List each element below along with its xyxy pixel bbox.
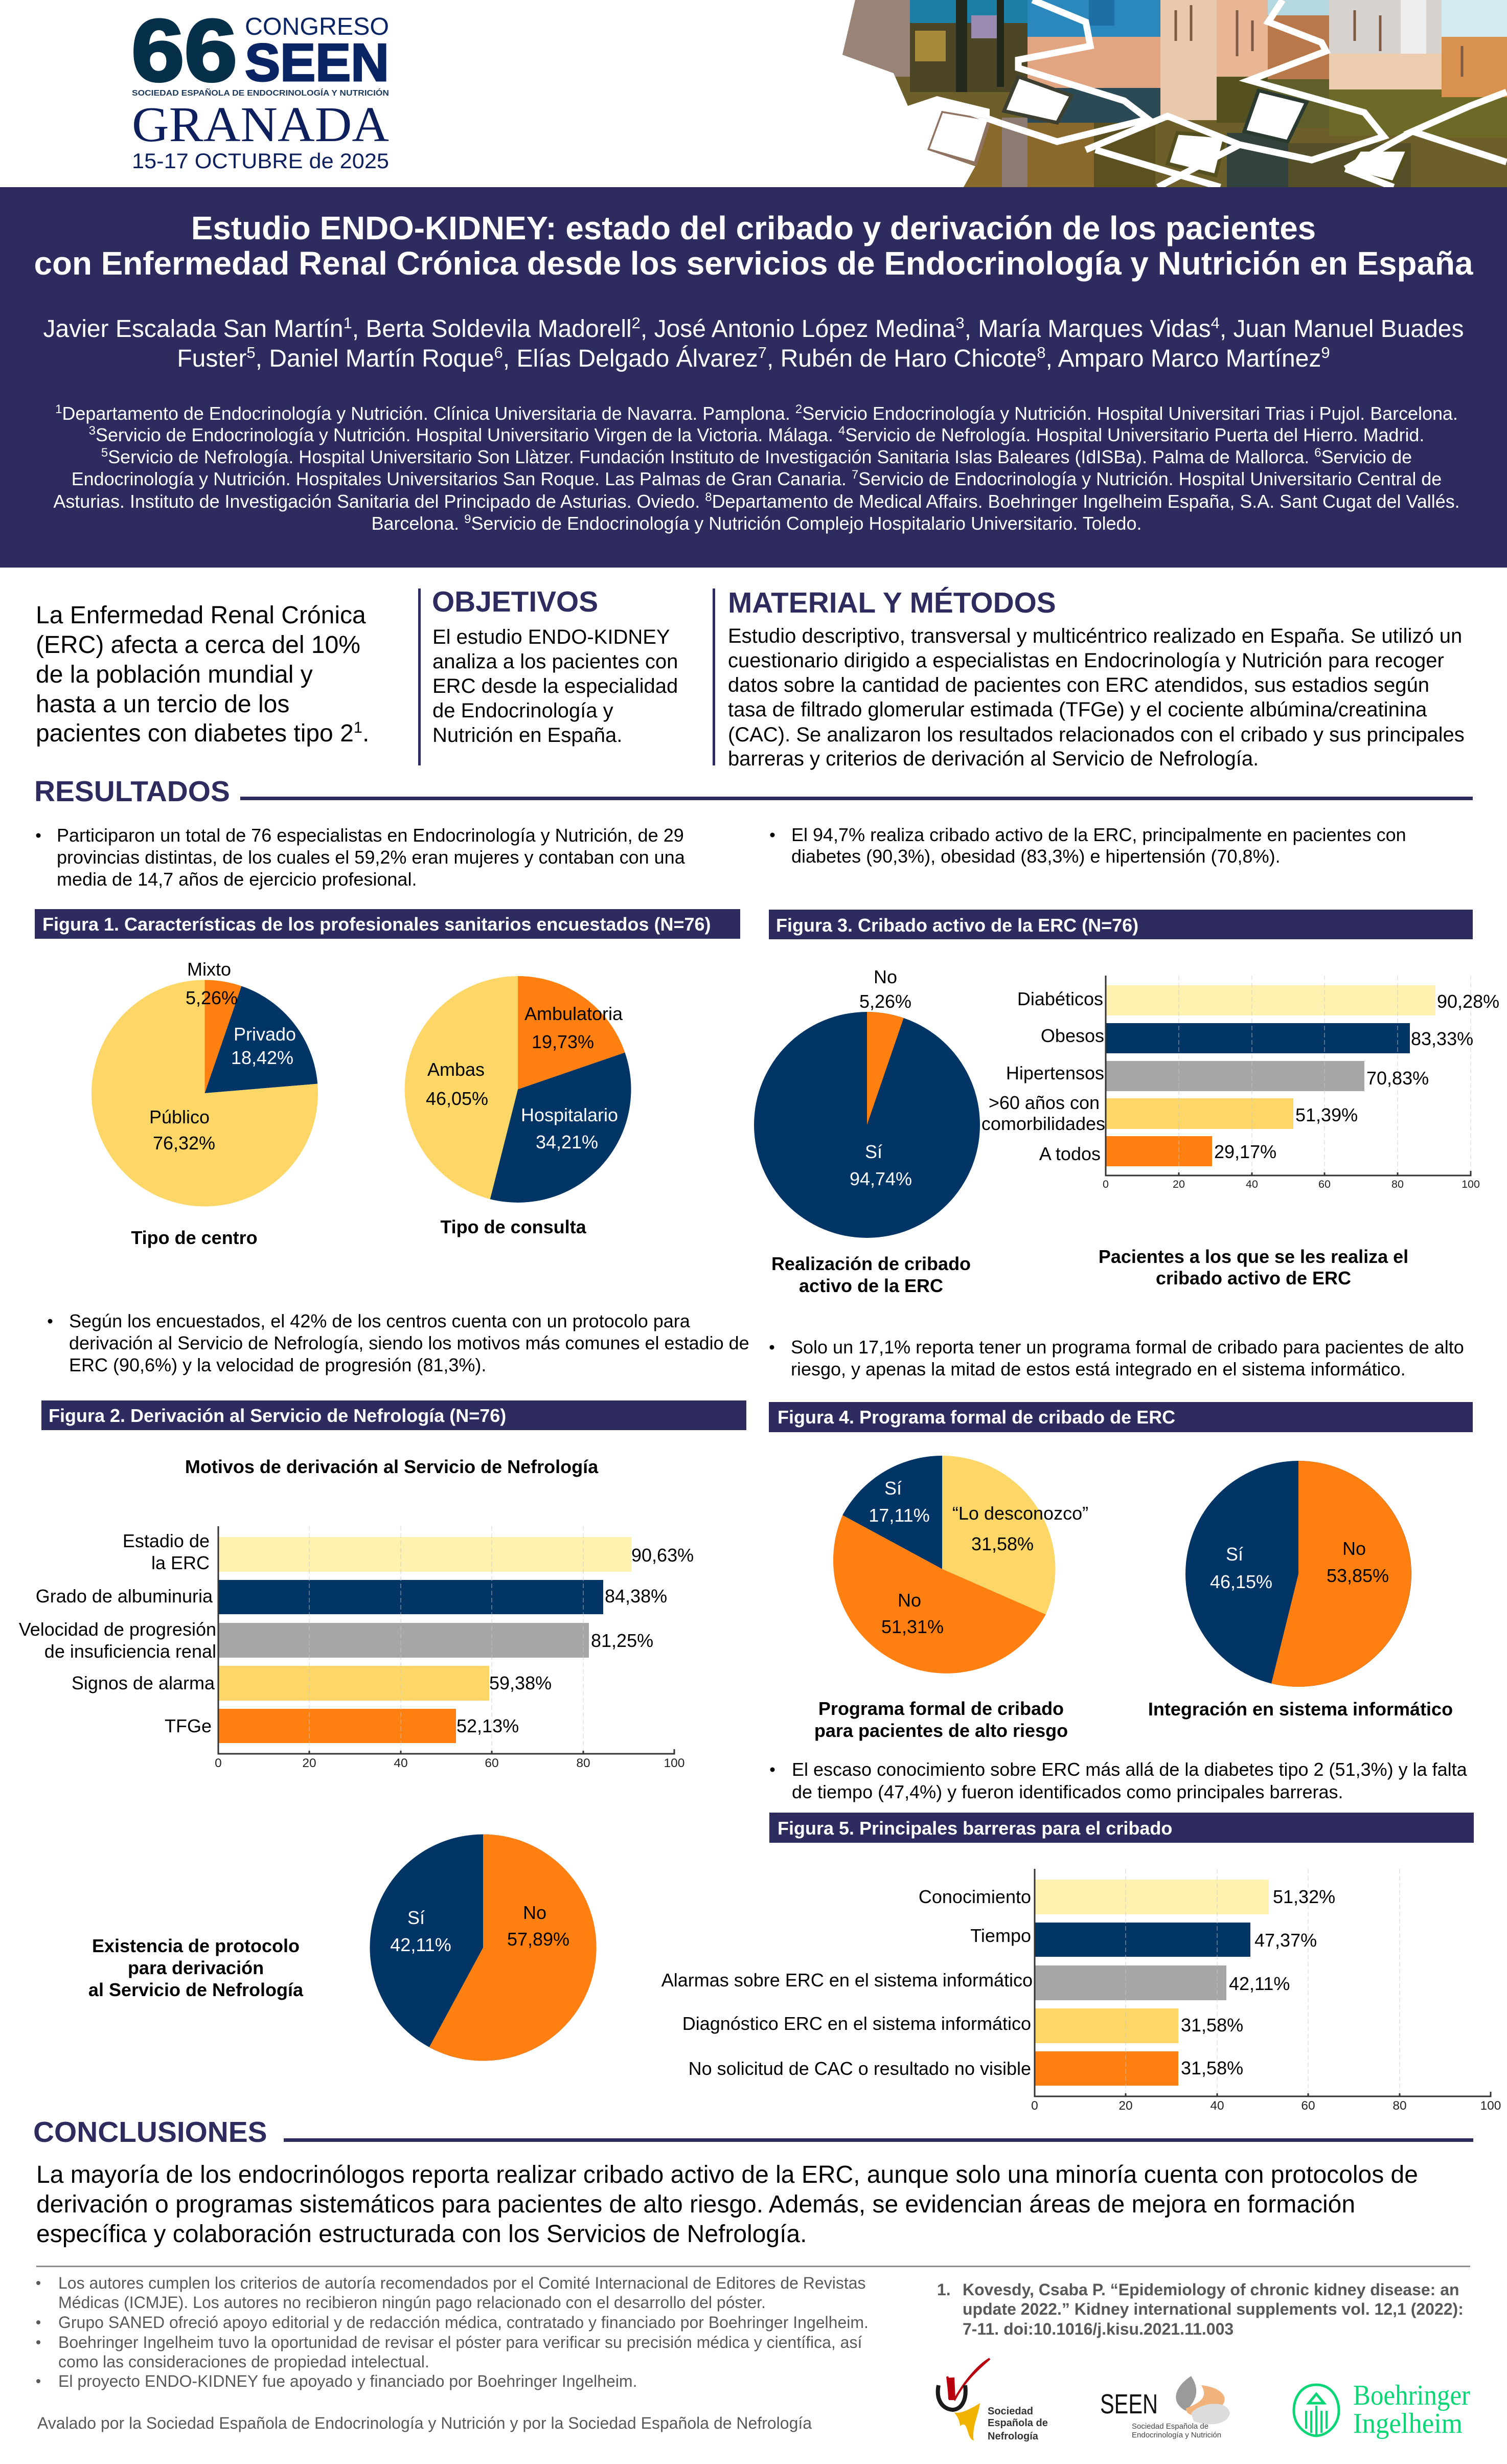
- intro text: de la población mundial y: [36, 661, 313, 688]
- bar chart: motivos de derivación: [19, 1526, 694, 1770]
- affiliations: Departamento de Medical Affairs. Boehringer Ingelheim España, S.A. Sant Cugat del Vallés.: [712, 491, 1460, 512]
- métodos text: (CAC). Se analizaron los resultados relacionados con el cribado y sus principales: [728, 724, 1465, 746]
- intro text: .: [362, 720, 369, 747]
- bar chart: pacientes cribados: 90,28%: [1437, 991, 1499, 1012]
- logo: SEEN: Sociedad Española de: [1132, 2422, 1208, 2431]
- title: con Enfermedad Renal Crónica desde los servicios de Endocrinología y Nutrición en España: [34, 245, 1473, 282]
- objetivos text: analiza a los pacientes con: [432, 650, 678, 673]
- bar chart: barreras: 51,32%: [1273, 1886, 1335, 1907]
- pie chart: programa formal: No: [898, 1590, 921, 1611]
- figure 4 header: [769, 1402, 1473, 1432]
- bar chart: pacientes cribados: comorbilidades: [981, 1113, 1105, 1134]
- footnotes: Boehringer Ingelheim tuvo la oportunidad de revisar el póster para verificar su precisión médica y científica, así: [58, 2333, 862, 2352]
- pie chart: realización de cribado: [754, 966, 980, 1296]
- pie chart: existencia de protocolo: No: [523, 1902, 546, 1923]
- panel: material y métodos: [713, 586, 1465, 770]
- métodos text: tasa de filtrado glomerular estimada (TFGe) y el cociente albúmina/creatinina: [728, 698, 1427, 721]
- affiliations: Departamento de Endocrinología y Nutrición. Clínica Universitaria de Navarra. Pamplona.: [62, 403, 795, 424]
- footnotes: [36, 2274, 869, 2390]
- reference: 7-11. doi:10.1016/j.kisu.2021.11.003: [963, 2320, 1234, 2338]
- heading: resultados: RESULTADOS: [34, 776, 230, 808]
- bar chart: motivos de derivación: de insuficiencia renal: [44, 1641, 216, 1662]
- authors: 2: [632, 314, 641, 332]
- authors: 7: [758, 344, 767, 361]
- logo: 66 Congreso SEEN Granada: [131, 2, 389, 173]
- affiliations: Servicio de Nefrología. Hospital Universitario Puerta del Hierro. Madrid.: [845, 425, 1424, 445]
- bar chart: motivos de derivación: Signos de alarma: [72, 1672, 215, 1693]
- conclusions text: específica y colaboración estructurada con los Servicios de Nefrología.: [36, 2221, 807, 2248]
- bar chart: motivos de derivación: 40: [394, 1756, 408, 1770]
- endorsement line: Avalado por la Sociedad Española de Endocrinología y Nutrición y por la Sociedad Española de Nefrología: [37, 2414, 812, 2432]
- bar chart: pacientes cribados: Diabéticos: [1017, 988, 1103, 1009]
- pie chart: programa formal: 51,31%: [881, 1616, 944, 1637]
- métodos text: cuestionario dirigido a especialistas en Endocrinología y Nutrición para recoger: [728, 649, 1444, 672]
- authors: , María Marques Vidas: [965, 315, 1211, 343]
- pie chart: tipo de consulta: 34,21%: [536, 1132, 598, 1152]
- pie chart: tipo de centro: [92, 959, 318, 1248]
- pie chart: tipo de consulta: Ambulatoria: [524, 1003, 623, 1024]
- conclusions text: derivación o programas sistemáticos para pacientes de alto riesgo. Además, se evidencian áreas de mejora en formación: [36, 2191, 1355, 2218]
- bar chart: motivos de derivación: 80: [576, 1756, 590, 1770]
- pie chart: tipo de consulta: Hospitalario: [521, 1104, 618, 1125]
- bar chart: motivos de derivación: Grado de albuminuria: [36, 1586, 213, 1607]
- logo: 66 Congreso SEEN Granada: GRANADA: [132, 97, 389, 152]
- logo: SEEN: SEEN: [1100, 2389, 1158, 2420]
- authors: Fuster: [177, 345, 246, 372]
- pie chart: tipo de consulta: Ambas: [427, 1059, 485, 1080]
- bullet: cribado activo: diabetes (90,3%), obesidad (83,3%) e hipertensión (70,8%).: [791, 846, 1281, 867]
- pie chart: programa formal: [814, 1456, 1088, 1741]
- bullet: cribado activo: [770, 824, 1406, 867]
- heading: conclusiones: CONCLUSIONES: [33, 2116, 267, 2149]
- logo: SEEN: Endocrinología y Nutrición: [1132, 2431, 1221, 2439]
- bar chart: motivos de derivación: 60: [485, 1756, 499, 1770]
- pie chart: tipo de centro: Público: [149, 1106, 210, 1127]
- affiliations: 8: [705, 490, 712, 504]
- affiliations: Servicio de Endocrinología y Nutrición. Hospital Universitario Virgen de la Victoria. Málaga.: [96, 425, 838, 445]
- affiliations: Asturias. Instituto de Investigación Sanitaria del Principado de Asturias. Oviedo.: [53, 491, 705, 512]
- bar chart: motivos de derivación: 84,38%: [605, 1586, 667, 1607]
- métodos text: datos sobre la cantidad de pacientes con ERC atendidos, sus estadios según: [728, 674, 1429, 696]
- intro text: 1: [354, 718, 362, 736]
- objetivos text: Nutrición en España.: [432, 724, 622, 747]
- caption: pacientes cribados: cribado activo de ERC: [1156, 1268, 1351, 1288]
- bar chart: barreras: 40: [1210, 2099, 1224, 2113]
- bar chart: pacientes cribados: 60: [1318, 1178, 1331, 1190]
- pie chart: tipo de centro: Privado: [234, 1024, 296, 1045]
- figure 3 header: [769, 910, 1473, 939]
- bar chart: pacientes cribados: >60 años con: [989, 1092, 1100, 1113]
- bar chart: barreras: Tiempo: [970, 1925, 1031, 1946]
- affiliations: Servicio Endocrinología y Nutrición. Hospital Universitari Trias i Pujol. Barcelona.: [802, 403, 1458, 424]
- bar chart: barreras: 31,58%: [1181, 2015, 1243, 2036]
- caption: programa formal: para pacientes de alto riesgo: [814, 1720, 1068, 1741]
- bar chart: motivos de derivación: la ERC: [151, 1552, 210, 1573]
- bullet: protocolo de derivación: Según los encuestados, el 42% de los centros cuenta con un protocolo para: [69, 1310, 690, 1331]
- objetivos text: ERC desde la especialidad: [432, 675, 678, 697]
- authors: , Berta Soldevila Madorell: [352, 315, 632, 343]
- bar chart: motivos de derivación: 59,38%: [489, 1672, 552, 1693]
- authors: , Daniel Martín Roque: [256, 345, 494, 372]
- figure 5 header: Figura 5. Principales barreras para el cribado: [778, 1818, 1172, 1839]
- affiliations: Endocrinología y Nutrición. Hospitales Universitarios San Roque. Las Palmas de Gran Canaria.: [72, 469, 852, 489]
- bar chart: pacientes cribados: 29,17%: [1214, 1141, 1276, 1162]
- bar chart: motivos de derivación: 90,63%: [631, 1545, 694, 1566]
- caption: programa formal: Programa formal de cribado: [818, 1698, 1064, 1719]
- pie chart: integración: 53,85%: [1327, 1565, 1389, 1586]
- footnotes: Médicas (ICMJE). Los autores no recibieron ningún pago relacionado con el desarrollo del póster.: [58, 2293, 766, 2312]
- header image: Alhambra mosaic: [838, 0, 1507, 187]
- bar chart: pacientes cribados: A todos: [1039, 1143, 1101, 1164]
- pie chart: existencia de protocolo: 57,89%: [507, 1929, 569, 1950]
- bullet: programa formal: Solo un 17,1% reporta tener un programa formal de cribado para pacientes de alto: [791, 1337, 1464, 1358]
- panel: objetivos: [418, 586, 678, 765]
- bullet: barreras: de tiempo (47,4%) y fueron identificados como principales barreras.: [792, 1781, 1343, 1802]
- bullet: protocolo de derivación: ERC (90,6%) y la velocidad de progresión (81,3%).: [69, 1354, 486, 1375]
- logo: Sociedad Española de Nefrología: Nefrología: [988, 2431, 1039, 2442]
- bar chart: pacientes cribados: 83,33%: [1411, 1028, 1473, 1049]
- footnotes: como las consideraciones de propiedad intelectual.: [58, 2353, 429, 2371]
- affiliations: Barcelona.: [372, 513, 464, 534]
- bar chart: motivos de derivación: Estadio de: [123, 1530, 210, 1551]
- pie chart: programa formal: 17,11%: [869, 1505, 930, 1526]
- bar chart: barreras: 42,11%: [1229, 1973, 1290, 1994]
- title band: [0, 187, 1507, 568]
- logo: Sociedad Española de Nefrología: [938, 2359, 1048, 2442]
- bar chart: pacientes cribados: Hipertensos: [1006, 1063, 1104, 1083]
- pie chart: tipo de centro: 18,42%: [231, 1047, 293, 1068]
- intro text: (ERC) afecta a cerca del 10%: [36, 631, 360, 659]
- pie chart: integración: No: [1342, 1538, 1366, 1559]
- bar chart: barreras: No solicitud de CAC o resultado no visible: [689, 2058, 1031, 2079]
- bar chart: pacientes cribados: 40: [1246, 1178, 1258, 1190]
- caption: existencia de protocolo: Existencia de protocolo: [92, 1935, 300, 1956]
- intro text: hasta a un tercio de los: [36, 691, 289, 718]
- reference: 1.: [937, 2280, 951, 2299]
- bar chart: motivos de derivación: 0: [215, 1756, 222, 1770]
- caption: tipo de centro: Tipo de centro: [131, 1227, 258, 1248]
- objetivos text: de Endocrinología y: [432, 699, 613, 722]
- figure 2 header: [41, 1400, 746, 1430]
- authors: 3: [955, 314, 965, 332]
- pie chart: tipo de centro: 76,32%: [153, 1133, 215, 1154]
- footnotes: Grupo SANED ofreció apoyo editorial y de redacción médica, contratado y financiado por Boehringer Ingelheim.: [58, 2313, 869, 2332]
- figure 2 header: Figura 2. Derivación al Servicio de Nefrología (N=76): [49, 1405, 506, 1426]
- bar chart: pacientes cribados: 51,39%: [1295, 1104, 1358, 1125]
- bullet: cribado activo: El 94,7% realiza cribado activo de la ERC, principalmente en pacientes con: [791, 824, 1406, 845]
- pie chart: integración: Sí: [1226, 1544, 1243, 1565]
- bar chart: pacientes cribados: 70,83%: [1366, 1068, 1429, 1089]
- logo: 66 Congreso SEEN Granada: SOCIEDAD ESPAÑOLA DE ENDOCRINOLOGÍA Y NUTRICIÓN: [132, 87, 389, 98]
- authors: 5: [246, 344, 256, 361]
- footnotes: Los autores cumplen los criterios de autoría recomendados por el Comité Internacional de Editores de Revistas: [58, 2274, 866, 2292]
- authors: , Juan Manuel Buades: [1220, 315, 1464, 343]
- bullet: protocolo de derivación: derivación al Servicio de Nefrología, siendo los motivos más comunes el estadio de: [69, 1332, 749, 1353]
- intro text: pacientes con diabetes tipo 2: [36, 720, 354, 747]
- bar chart: barreras: Conocimiento: [919, 1886, 1031, 1907]
- bar chart: motivos de derivación: 52,13%: [456, 1715, 519, 1736]
- bar chart: barreras: [661, 1869, 1501, 2113]
- affiliations: 4: [838, 424, 845, 438]
- pie chart: realización de cribado: Sí: [865, 1141, 882, 1162]
- title: Estudio ENDO-KIDNEY: estado del cribado y derivación de los pacientes: [191, 210, 1316, 246]
- authors: , Elías Delgado Álvarez: [503, 345, 758, 372]
- bar chart: pacientes cribados: Obesos: [1041, 1025, 1104, 1046]
- bar chart: barreras: Alarmas sobre ERC en el sistema informático: [661, 1970, 1033, 1991]
- conclusions text: La mayoría de los endocrinólogos reporta realizar cribado activo de la ERC, aunque solo una minoría cuenta con protocolos de: [36, 2161, 1418, 2188]
- pie chart: existencia de protocolo: Sí: [407, 1907, 425, 1928]
- pie chart: programa formal: “Lo desconozco”: [952, 1503, 1088, 1524]
- logo: 66 Congreso SEEN Granada: CONGRESO: [245, 13, 389, 40]
- authors: Javier Escalada San Martín: [43, 315, 343, 343]
- bar chart: motivos de derivación: 100: [664, 1756, 684, 1770]
- heading: material y métodos: MATERIAL Y MÉTODOS: [728, 586, 1056, 619]
- pie chart: existencia de protocolo: [88, 1835, 597, 2061]
- authors: 1: [343, 314, 352, 332]
- affiliations: 9: [464, 512, 471, 526]
- authors: 4: [1211, 314, 1220, 332]
- bullet: participantes: provincias distintas, de los cuales el 59,2% eran mujeres y contaban con una: [57, 847, 686, 868]
- objetivos text: El estudio ENDO-KIDNEY: [432, 626, 670, 648]
- bullet: participantes: media de 14,7 años de ejercicio profesional.: [57, 869, 417, 890]
- logo: 66 Congreso SEEN Granada: 66: [131, 2, 237, 100]
- bar chart: barreras: 0: [1031, 2099, 1038, 2113]
- authors: 8: [1037, 344, 1046, 361]
- figure 4 header: Figura 4. Programa formal de cribado de ERC: [778, 1407, 1175, 1428]
- pie chart: tipo de consulta: 19,73%: [532, 1031, 594, 1052]
- authors: 6: [494, 344, 503, 361]
- bar chart: motivos de derivación: 20: [302, 1756, 316, 1770]
- pie chart: realización de cribado: 94,74%: [850, 1168, 912, 1189]
- authors: , Amparo Marco Martínez: [1046, 345, 1321, 372]
- bullet: programa formal: [770, 1337, 1464, 1380]
- pie chart: tipo de centro: 5,26%: [186, 987, 238, 1008]
- pie chart: tipo de consulta: [405, 976, 631, 1237]
- logo: Sociedad Española de Nefrología: Española de: [988, 2417, 1048, 2429]
- pie chart: tipo de consulta: 46,05%: [426, 1088, 488, 1109]
- bullet: participantes: [36, 825, 686, 890]
- caption: tipo de consulta: Tipo de consulta: [440, 1216, 587, 1237]
- logo: Boehringer Ingelheim: Ingelheim: [1353, 2408, 1463, 2439]
- reference: [937, 2280, 1464, 2338]
- affiliations: 3: [89, 424, 96, 438]
- bullet: barreras: [770, 1759, 1468, 1802]
- affiliations: 7: [852, 468, 858, 482]
- logo: 66 Congreso SEEN Granada: SEEN: [245, 33, 389, 93]
- bar chart: pacientes cribados: 20: [1173, 1178, 1185, 1190]
- bar chart: pacientes cribados: 100: [1462, 1178, 1480, 1190]
- bullet: protocolo de derivación: [48, 1310, 749, 1375]
- bullet: programa formal: riesgo, y apenas la mitad de estos está integrado en el sistema informático.: [791, 1359, 1406, 1380]
- affiliations: 6: [1314, 446, 1321, 460]
- intro text: La Enfermedad Renal Crónica: [36, 602, 366, 629]
- bar chart: motivos de derivación: TFGe: [165, 1715, 212, 1736]
- affiliations: Servicio de Endocrinología y Nutrición Complejo Hospitalario Universitario. Toledo.: [471, 513, 1141, 534]
- reference: update 2022.” Kidney international supplements vol. 12,1 (2022):: [963, 2300, 1464, 2318]
- pie chart: programa formal: Sí: [884, 1478, 902, 1499]
- bar chart: barreras: Diagnóstico ERC en el sistema informático: [682, 2013, 1031, 2034]
- figure 5 header: [769, 1813, 1474, 1843]
- bar chart: pacientes cribados: 0: [1103, 1178, 1109, 1190]
- bar chart: motivos de derivación: Velocidad de progresión: [19, 1619, 216, 1640]
- pie chart: programa formal: 31,58%: [971, 1533, 1034, 1554]
- bullet: barreras: El escaso conocimiento sobre ERC más allá de la diabetes tipo 2 (51,3%) y la falta: [792, 1759, 1467, 1780]
- heading: conclusiones: [33, 2116, 1473, 2149]
- caption: realización de cribado: activo de la ERC: [799, 1275, 943, 1296]
- affiliations: 5: [101, 446, 108, 460]
- heading: resultados: [34, 776, 1473, 808]
- chart title: motivos de derivación: Motivos de derivación al Servicio de Nefrología: [185, 1456, 599, 1477]
- bar chart: barreras: 20: [1118, 2099, 1133, 2113]
- affiliations: Servicio de Nefrología. Hospital Universitario Son Llàtzer. Fundación Instituto de Investigación Sanitaria Islas Baleares (IdISBa). Palma de Mallorca.: [108, 447, 1314, 467]
- bar chart: barreras: 100: [1480, 2099, 1501, 2113]
- bar chart: barreras: 60: [1301, 2099, 1315, 2113]
- bar chart: motivos de derivación: 81,25%: [591, 1630, 653, 1651]
- bar chart: pacientes cribados: [981, 976, 1499, 1288]
- logo: SEEN: [1100, 2376, 1230, 2439]
- affiliations: 2: [795, 402, 802, 416]
- intro text: [36, 602, 369, 747]
- reference: Kovesdy, Csaba P. “Epidemiology of chronic kidney disease: an: [963, 2280, 1459, 2299]
- heading: objetivos: OBJETIVOS: [432, 586, 598, 618]
- pie chart: integración: 46,15%: [1210, 1571, 1272, 1592]
- métodos text: Estudio descriptivo, transversal y multicéntrico realizado en España. Se utilizó un: [728, 625, 1462, 647]
- logo: Boehringer Ingelheim: [1294, 2380, 1470, 2439]
- bar chart: barreras: 47,37%: [1254, 1930, 1317, 1951]
- pie chart: integración: [1148, 1461, 1453, 1720]
- caption: integración: Integración en sistema informático: [1148, 1699, 1453, 1720]
- affiliations: 1: [55, 402, 62, 416]
- pie chart: realización de cribado: No: [874, 966, 897, 987]
- caption: pacientes cribados: Pacientes a los que se les realiza el: [1099, 1246, 1408, 1267]
- authors: , José Antonio López Medina: [641, 315, 956, 343]
- caption: existencia de protocolo: al Servicio de Nefrología: [88, 1979, 304, 2000]
- bullet: participantes: Participaron un total de 76 especialistas en Endocrinología y Nutrición, de 29: [57, 825, 684, 846]
- pie chart: realización de cribado: 5,26%: [859, 991, 911, 1012]
- bar chart: barreras: 31,58%: [1181, 2058, 1243, 2078]
- figure 3 header: Figura 3. Cribado activo de la ERC (N=76): [776, 915, 1138, 936]
- affiliations: Servicio de Endocrinología y Nutrición. Hospital Universitario Central de: [858, 469, 1442, 489]
- footnotes: El proyecto ENDO-KIDNEY fue apoyado y financiado por Boehringer Ingelheim.: [58, 2372, 637, 2390]
- pie chart: tipo de centro: Mixto: [187, 959, 231, 980]
- logo: Boehringer Ingelheim: Boehringer: [1353, 2380, 1470, 2411]
- affiliations: Servicio de: [1321, 447, 1412, 467]
- pie chart: existencia de protocolo: 42,11%: [390, 1934, 451, 1955]
- bar chart: pacientes cribados: 80: [1391, 1178, 1404, 1190]
- authors: , Rubén de Haro Chicote: [767, 345, 1037, 372]
- figure 1 header: [35, 909, 740, 939]
- métodos text: barreras y criterios de derivación al Servicio de Nefrología.: [728, 748, 1259, 770]
- logo: Sociedad Española de Nefrología: Sociedad: [988, 2406, 1033, 2417]
- bar chart: barreras: 80: [1392, 2099, 1407, 2113]
- logo: 66 Congreso SEEN Granada: 15-17 OCTUBRE de 2025: [132, 149, 389, 173]
- figure 1 header: Figura 1. Características de los profesionales sanitarios encuestados (N=76): [42, 914, 711, 935]
- authors: 9: [1321, 344, 1330, 361]
- caption: realización de cribado: Realización de cribado: [771, 1253, 971, 1274]
- caption: existencia de protocolo: para derivación: [128, 1957, 264, 1978]
